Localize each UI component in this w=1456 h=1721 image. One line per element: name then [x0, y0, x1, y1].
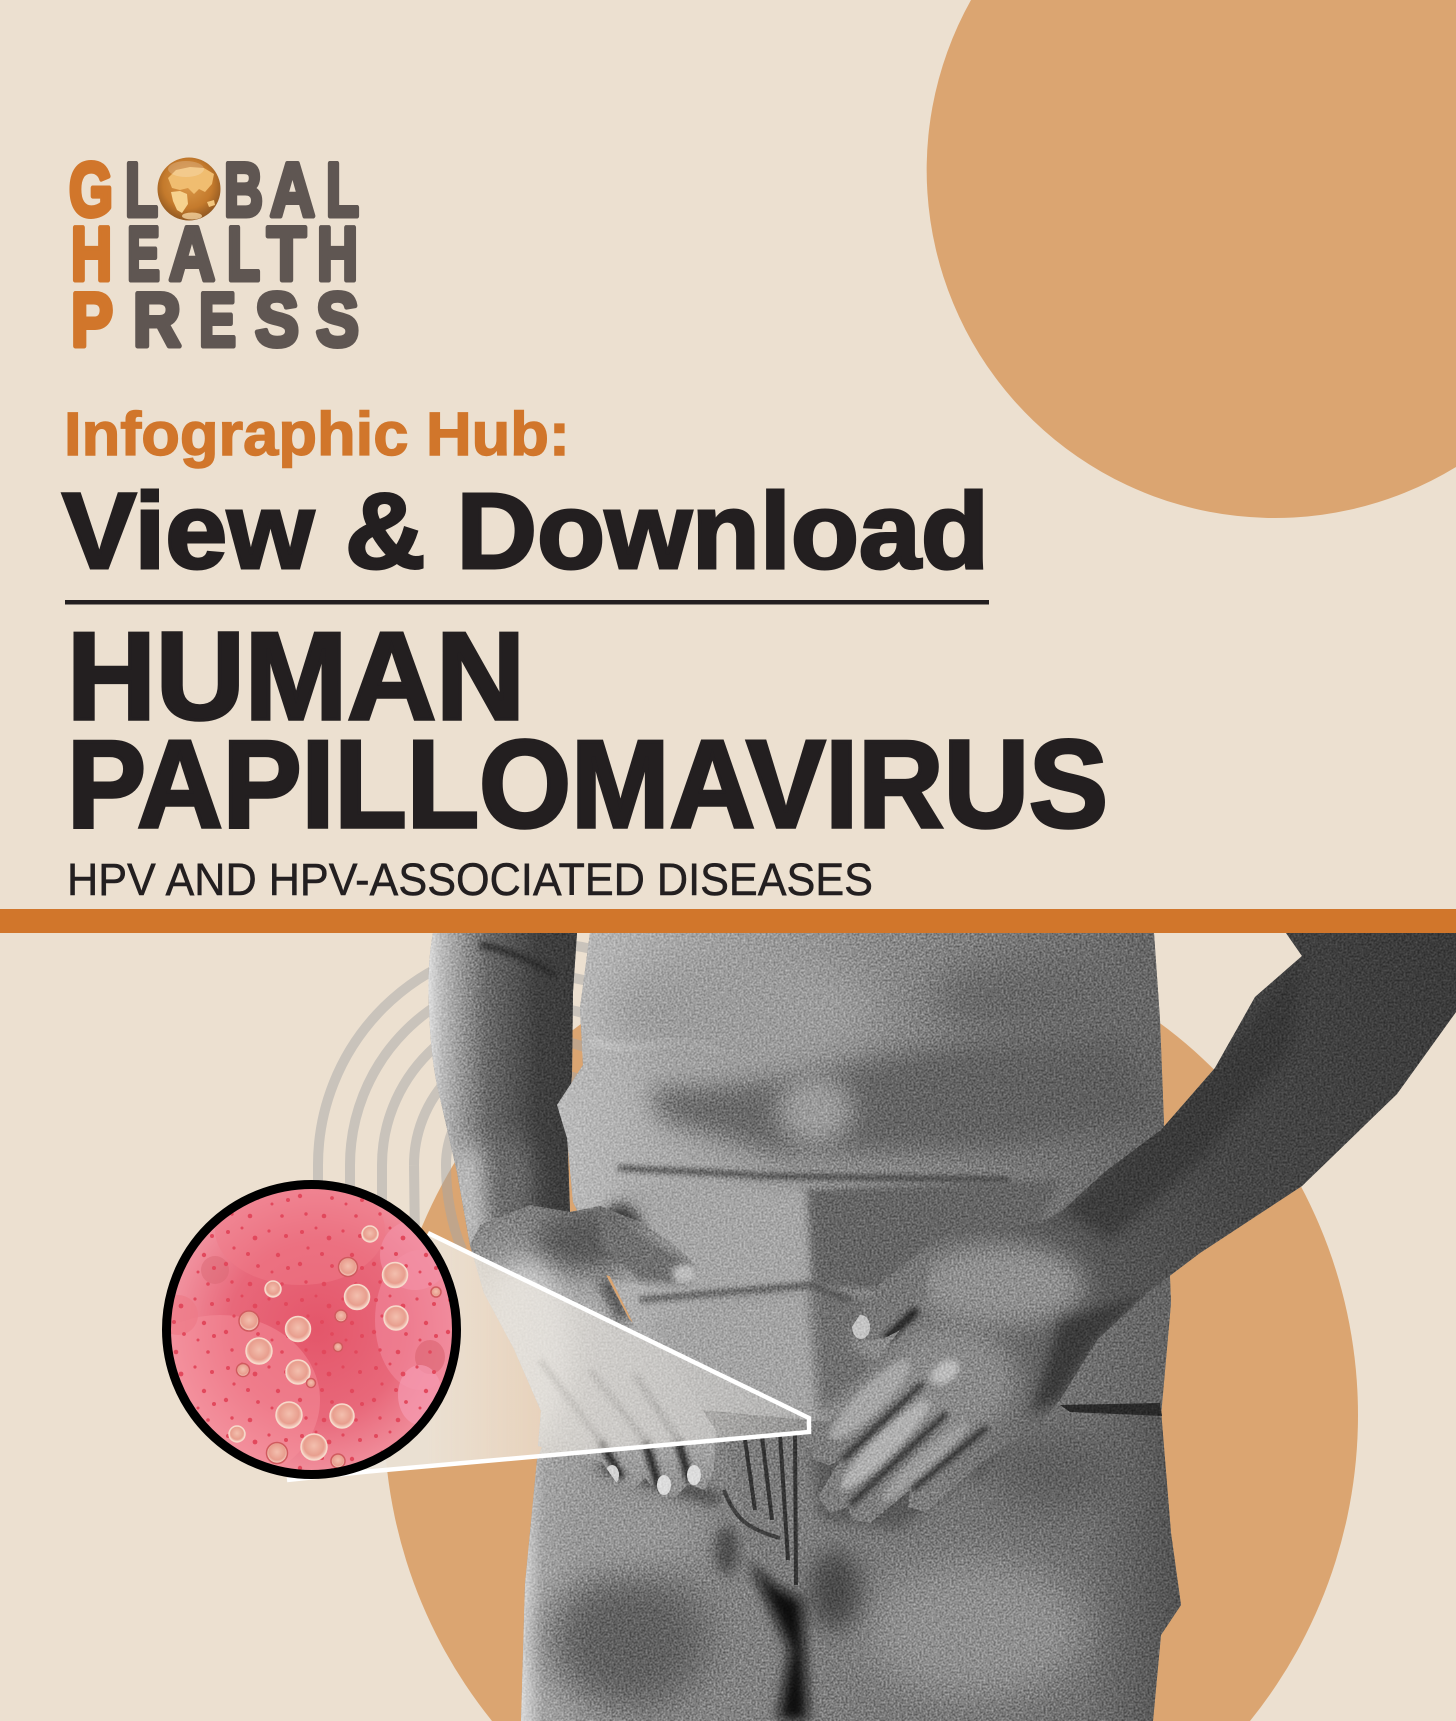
logo globe icon: [158, 158, 220, 220]
figure: left arm: [428, 933, 577, 1252]
logo grey letters: A: [169, 212, 215, 297]
skin texture blobs: [171, 1189, 445, 1448]
logo orange initials: G: [69, 148, 113, 233]
logo grey letters: L: [125, 148, 158, 233]
logo orange initials: P: [71, 278, 113, 363]
logo grey letters: [125, 148, 359, 363]
logo grey letters: S: [255, 278, 299, 363]
callout: magnified skin lesion: [120, 1175, 465, 1485]
orange divider bar: [0, 909, 1456, 933]
figure: right arm and hand: [800, 930, 1456, 1530]
logo grey letters: E: [127, 212, 160, 297]
decorative circle: behind figure: [384, 928, 1358, 1721]
logo grey letters: T: [267, 212, 306, 297]
logo grey letters: B: [224, 148, 263, 233]
heading rule: [65, 600, 989, 604]
lens border: [166, 1184, 456, 1474]
title: Human: HUMAN: [67, 608, 525, 746]
logo orange initials: H: [71, 212, 112, 297]
logo grey letters: E: [199, 278, 236, 363]
figure: shirt: [550, 930, 1180, 1430]
decorative circle: top right: [927, 0, 1456, 518]
logo grey letters: A: [270, 148, 315, 233]
heading: View & Download: View & Download: [62, 470, 989, 591]
figure: jeans: [520, 1400, 1185, 1721]
title: Papillomavirus: PAPILLOMAVIRUS: [67, 716, 1108, 854]
red speckles: [172, 1194, 450, 1470]
figure: left hand: [465, 1200, 725, 1500]
figure: waistband shadow: [1060, 1403, 1162, 1416]
logo: Global Health Press: [69, 148, 359, 363]
logo orange initials: [69, 148, 113, 363]
logo grey letters: S: [316, 278, 359, 363]
logo grey letters: H: [317, 212, 358, 297]
papules: [229, 1226, 441, 1468]
logo grey letters: R: [133, 278, 181, 363]
logo grey letters: L: [326, 148, 359, 233]
logo grey letters: L: [227, 212, 260, 297]
subtitle: HPV AND HPV-ASSOCIATED DISEASES: [67, 854, 873, 905]
concentric rings: [318, 943, 762, 1250]
callout: magnified wedge: [287, 1233, 809, 1480]
figure: man holding groin: [425, 930, 1456, 1721]
heading: Infographic Hub: Infographic Hub:: [64, 400, 570, 468]
